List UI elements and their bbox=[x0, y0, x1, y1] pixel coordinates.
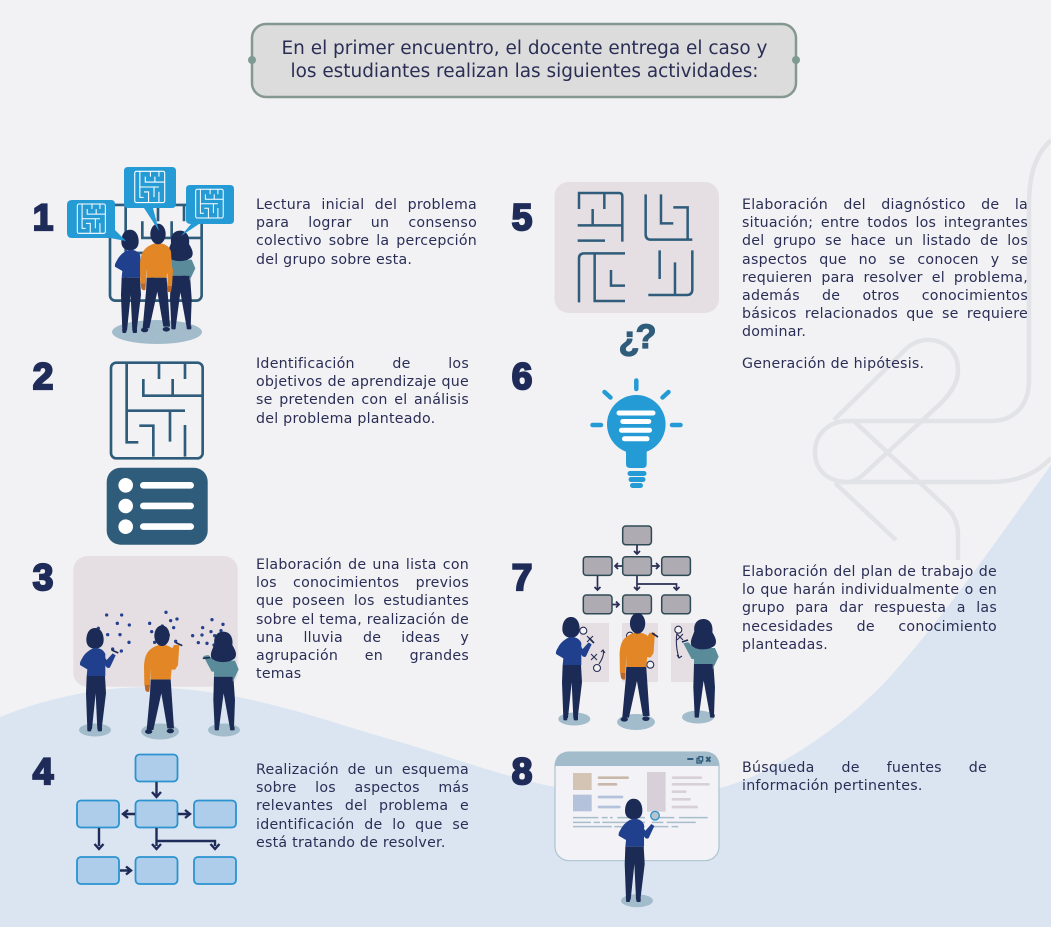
icon: light bulb bbox=[592, 380, 680, 488]
text 4 bbox=[256, 762, 469, 851]
number 2: 2 bbox=[33, 356, 53, 397]
text 1: para lograr un consenso bbox=[256, 215, 477, 231]
marker pens bbox=[589, 633, 688, 643]
text 3: los conocimientos previos bbox=[256, 575, 469, 591]
text 4: identificación de lo que se bbox=[256, 817, 469, 833]
icon: question marks bbox=[619, 318, 656, 358]
illustration 5: maze pieces panel bbox=[554, 182, 719, 313]
text 8: Búsqueda de fuentes de bbox=[742, 760, 987, 776]
text 2: se pretenden con el análisis bbox=[256, 392, 469, 408]
board marks bbox=[580, 626, 683, 672]
illustration 7: flow chart with students planning bbox=[556, 526, 719, 730]
number 7: 7 bbox=[512, 557, 532, 598]
number 1: 1 bbox=[33, 197, 53, 238]
icon: list panel bbox=[107, 468, 208, 545]
text 6: Generación de hipótesis. bbox=[742, 356, 924, 372]
text 5: aspectos que no se conocen y se bbox=[742, 252, 1028, 268]
illustration 4: blue flow chart bbox=[77, 754, 236, 884]
text 5: requieren para resolver el problema, bbox=[742, 270, 1028, 286]
illustration 8: browser window with student bbox=[555, 752, 719, 907]
text 7: Elaboración del plan de trabajo de bbox=[742, 564, 997, 580]
text 1: colectivo sobre la percepción bbox=[256, 233, 477, 249]
text 3: una lluvia de ideas y bbox=[256, 630, 469, 646]
text 3: sobre el tema, realización de bbox=[256, 612, 469, 628]
title text: En el primer encuentro, el docente entrega el caso y bbox=[282, 38, 767, 59]
magnifier bbox=[651, 811, 659, 820]
speech bubble center bbox=[124, 167, 176, 231]
number 3: 3 bbox=[33, 557, 53, 598]
illustration 3: students brainstorming at board bbox=[73, 556, 240, 740]
speech bubble left bbox=[67, 200, 126, 241]
background: light blue wave bbox=[0, 465, 1051, 927]
text 7 bbox=[742, 564, 997, 653]
text 4: Realización de un esquema bbox=[256, 762, 469, 778]
text 5: además de otros conocimientos bbox=[742, 288, 1028, 304]
text 7: grupo para dar respuesta a las bbox=[742, 600, 997, 616]
grey flow chart bbox=[583, 526, 690, 614]
text 1 bbox=[256, 197, 477, 268]
text 3: temas bbox=[256, 666, 301, 682]
text 8 bbox=[742, 760, 987, 794]
shadows bbox=[79, 724, 240, 740]
text 8: información pertinentes. bbox=[742, 778, 923, 794]
number 5: 5 bbox=[512, 197, 532, 238]
text 5: situación; entre todos los integrantes bbox=[742, 215, 1028, 231]
text 5: dominar. bbox=[742, 324, 806, 340]
text 7: lo que harán individualmente o en bbox=[742, 582, 997, 598]
text 1: Lectura inicial del problema bbox=[256, 197, 477, 213]
idea dots bbox=[97, 611, 225, 653]
text 5 bbox=[742, 197, 1028, 340]
text 2 bbox=[256, 356, 469, 427]
speech bubble right bbox=[181, 185, 234, 236]
text 5: básicos relacionados que se requiere bbox=[742, 306, 1028, 322]
text 1: del grupo sobre esta. bbox=[256, 252, 412, 268]
text 5: Elaboración del diagnóstico de la bbox=[742, 197, 1028, 213]
text 4: sobre los aspectos más bbox=[256, 780, 469, 796]
text 7: planteadas. bbox=[742, 637, 828, 653]
text 2: Identificación de los bbox=[256, 356, 469, 372]
illustration 1: group reading maze with speech bubbles bbox=[67, 167, 234, 344]
number 4: 4 bbox=[33, 751, 54, 792]
boards bbox=[580, 623, 710, 682]
text 3: agrupación en grandes bbox=[256, 648, 469, 664]
text 5: del grupo se hace un listado de los bbox=[742, 233, 1028, 249]
text 4: está tratando de resolver. bbox=[256, 835, 446, 851]
text 4: relevantes del problema e bbox=[256, 798, 469, 814]
text 3: que poseen los estudiantes bbox=[256, 593, 469, 609]
text 2: del problema planteado. bbox=[256, 411, 435, 427]
title text: los estudiantes realizan las siguientes actividades: bbox=[290, 61, 759, 82]
text 2: objetivos de aprendizaje que bbox=[256, 374, 469, 390]
illustration 2: maze and list bbox=[107, 363, 208, 545]
flow arrows bbox=[94, 782, 220, 874]
icon: question marks: ¿ bbox=[619, 320, 639, 358]
number 6: 6 bbox=[512, 356, 532, 397]
title text bbox=[282, 38, 767, 82]
window controls bbox=[573, 757, 710, 827]
text 7: necesidades de conocimiento bbox=[742, 619, 997, 635]
icon: question marks: ? bbox=[636, 318, 656, 356]
text 3: Elaboración de una lista con bbox=[256, 557, 469, 573]
icon: maze bbox=[111, 363, 203, 458]
title box bbox=[248, 24, 800, 97]
number 8: 8 bbox=[512, 751, 532, 792]
text 3 bbox=[256, 557, 469, 682]
decorative outlines bbox=[815, 140, 1051, 560]
